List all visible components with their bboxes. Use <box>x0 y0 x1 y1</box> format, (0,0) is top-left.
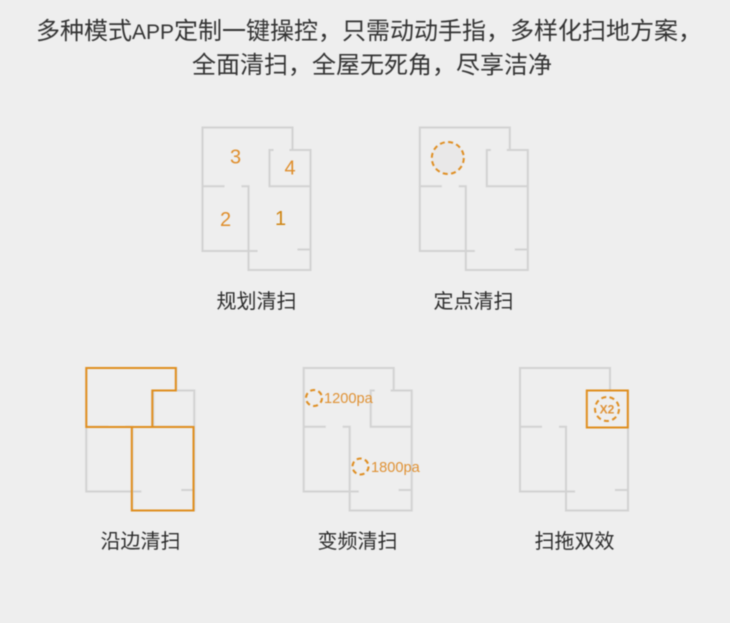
icon: dashed circle 1800pa <box>352 458 368 474</box>
room numbers: 3 <box>230 146 241 168</box>
room numbers: 2 <box>220 209 231 231</box>
panel: spot cleaning <box>420 128 528 313</box>
title: 多种模式APP定制一键操控，只需动动手指，多样化扫地方案， <box>36 18 702 45</box>
room numbers: 4 <box>284 158 296 180</box>
label: spot cleaning: 定点清扫 <box>434 290 514 313</box>
orange edge outline <box>86 368 194 510</box>
floor plan: sweep and mop <box>520 368 628 510</box>
text: 1200pa: 1200pa <box>324 391 374 407</box>
icon: dashed spot circle <box>432 142 464 174</box>
text: X2: X2 <box>600 402 615 416</box>
text: 1800pa: 1800pa <box>371 460 421 476</box>
room numbers <box>220 146 296 231</box>
panel: sweep and mop <box>520 368 628 553</box>
label: sweep and mop: 扫拖双效 <box>534 530 614 553</box>
floor plan: spot cleaning <box>420 128 528 270</box>
room numbers: 1 <box>275 208 286 230</box>
title: 全面清扫，全屋无死角，尽享洁净 <box>192 52 552 79</box>
orange room highlight <box>587 390 628 428</box>
floor plan: edge cleaning base <box>86 368 194 510</box>
floor plan: suction <box>304 368 412 510</box>
panel: zone cleaning <box>202 128 310 313</box>
floor plan: zone cleaning <box>202 128 310 270</box>
panel: variable suction cleaning <box>304 368 421 553</box>
label: variable suction cleaning: 变频清扫 <box>318 530 398 553</box>
title <box>36 18 702 79</box>
icon: dashed circle 1200pa <box>306 390 322 406</box>
icon: dashed X2 circle <box>595 397 619 421</box>
panel: edge cleaning <box>86 368 194 553</box>
label: edge cleaning: 沿边清扫 <box>100 530 180 553</box>
label: zone cleaning: 规划清扫 <box>216 290 296 313</box>
